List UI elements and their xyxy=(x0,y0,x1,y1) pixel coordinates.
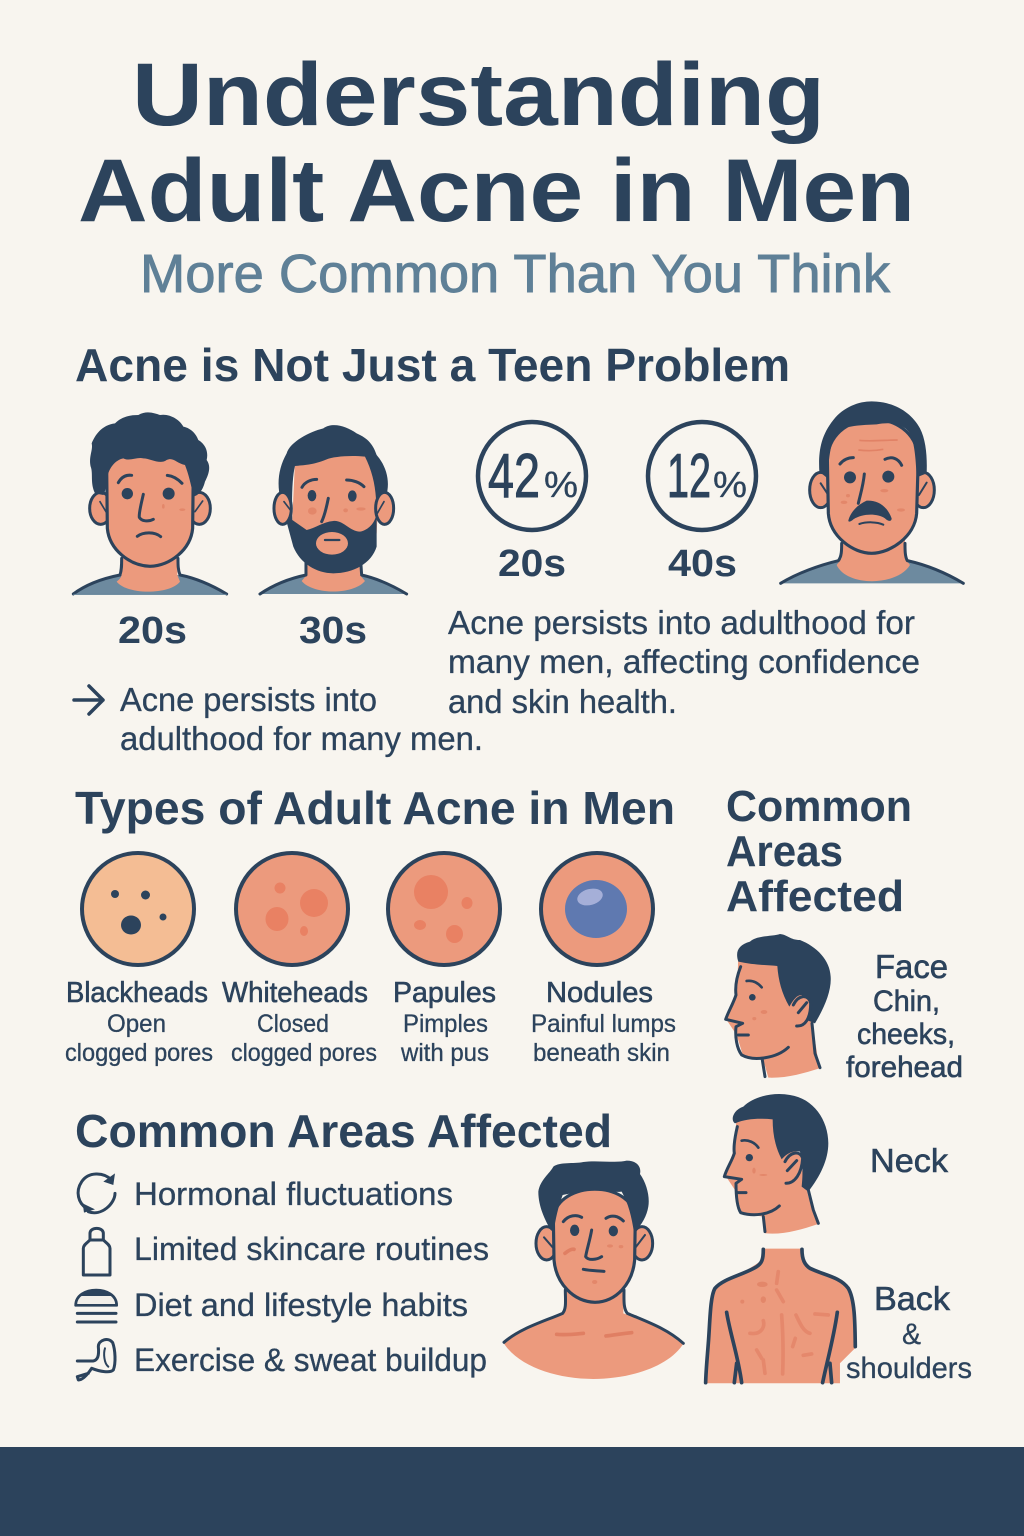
acne type: papules: Papules xyxy=(393,977,496,1009)
list: contributing factors xyxy=(76,1173,489,1380)
body text: acne persists: Acne persists into xyxy=(120,681,377,718)
text: hormonal fluctuations: Hormonal fluctuations xyxy=(134,1176,453,1212)
acne type: nodules: Painful lumps xyxy=(531,1010,676,1038)
heading: not just a teen problem: Acne is Not Just a Teen Problem xyxy=(75,339,790,391)
acne type: nodules: Nodules xyxy=(546,977,653,1009)
text: exercise: Exercise & sweat buildup xyxy=(134,1342,487,1378)
acne type: papules: with pus xyxy=(400,1039,489,1067)
body text: adulthood and confidence: and skin health. xyxy=(448,683,677,720)
label: face: Chin, xyxy=(873,985,940,1018)
icon: burger xyxy=(76,1290,117,1322)
portrait: man in his 20s xyxy=(73,412,227,594)
label: back and shoulders: & xyxy=(902,1318,921,1351)
heading: common areas affected (right column): Common xyxy=(726,782,912,831)
acne type: whiteheads: Closed xyxy=(257,1010,329,1038)
title xyxy=(78,44,915,240)
label: back and shoulders: shoulders xyxy=(846,1352,972,1385)
text: diet: Diet and lifestyle habits xyxy=(134,1287,468,1323)
heading: common areas affected (right column): Affected xyxy=(726,872,904,921)
title: Understanding xyxy=(132,44,825,144)
label: face: forehead xyxy=(846,1051,963,1084)
icon: hormonal cycle xyxy=(78,1173,115,1213)
heading: common areas affected (right column): Areas xyxy=(726,827,843,876)
acne type: whiteheads: Whiteheads xyxy=(222,977,368,1009)
label: face: Face xyxy=(875,948,948,985)
illustration: face profile xyxy=(726,934,831,1078)
illustration: neck profile xyxy=(724,1094,828,1234)
stat: 12% in 40s: 40s xyxy=(668,543,737,585)
acne type: nodules xyxy=(531,853,676,1067)
illustration: man's face, neck and shoulders xyxy=(503,1161,684,1379)
icon: flexed arm xyxy=(77,1340,115,1380)
label: back and shoulders xyxy=(846,1280,972,1385)
stat: 42% in 20s: % xyxy=(544,464,578,505)
portrait: older man with moustache xyxy=(781,401,963,583)
acne type: nodules: beneath skin xyxy=(533,1039,670,1067)
stat: 12% in 40s: % xyxy=(713,464,747,505)
body text: acne persists xyxy=(120,681,483,757)
acne type: blackheads xyxy=(65,853,213,1067)
stat: 12% in 40s: 12 xyxy=(667,442,711,511)
label: 30s: 30s xyxy=(299,610,367,652)
label: face: cheeks, xyxy=(857,1018,955,1051)
illustration: back and shoulders xyxy=(705,1249,857,1383)
acne type: blackheads: clogged pores xyxy=(65,1039,213,1067)
stat: 42% in 20s: 42 xyxy=(488,442,540,511)
acne type: papules: Pimples xyxy=(403,1010,488,1038)
title: Adult Acne in Men xyxy=(78,140,915,240)
portrait: bearded man in his 30s xyxy=(260,425,407,594)
acne type: whiteheads: clogged pores xyxy=(231,1039,377,1067)
icon: arrow xyxy=(74,686,103,714)
icon: skincare bottle xyxy=(83,1228,110,1275)
acne type: papules xyxy=(388,853,500,1067)
label: neck: Neck xyxy=(870,1142,949,1179)
heading: common areas affected (right column) xyxy=(726,782,912,921)
stat: 42% in 20s: 20s xyxy=(498,543,566,585)
heading: types of adult acne: Types of Adult Acne in Men xyxy=(75,782,675,834)
body text: adulthood and confidence: many men, affecting confidence xyxy=(448,643,920,680)
acne type: blackheads: Blackheads xyxy=(66,977,208,1009)
heading: common areas affected (left): Common Areas Affected xyxy=(75,1105,612,1157)
stat: 12% in 40s xyxy=(648,422,756,585)
stat: 42% in 20s xyxy=(478,422,586,585)
label: 20s: 20s xyxy=(118,610,187,652)
label: back and shoulders: Back xyxy=(874,1280,951,1317)
body text: adulthood and confidence: Acne persists into adulthood for xyxy=(448,604,915,641)
acne type: whiteheads xyxy=(222,853,377,1067)
body text: adulthood and confidence xyxy=(448,604,920,720)
label: face xyxy=(846,948,963,1084)
footer band xyxy=(0,1447,1024,1536)
subtitle: More Common Than You Think xyxy=(140,244,891,304)
text: limited skincare: Limited skincare routines xyxy=(134,1231,489,1267)
body text: acne persists: adulthood for many men. xyxy=(120,720,483,757)
acne type: blackheads: Open xyxy=(107,1010,166,1038)
